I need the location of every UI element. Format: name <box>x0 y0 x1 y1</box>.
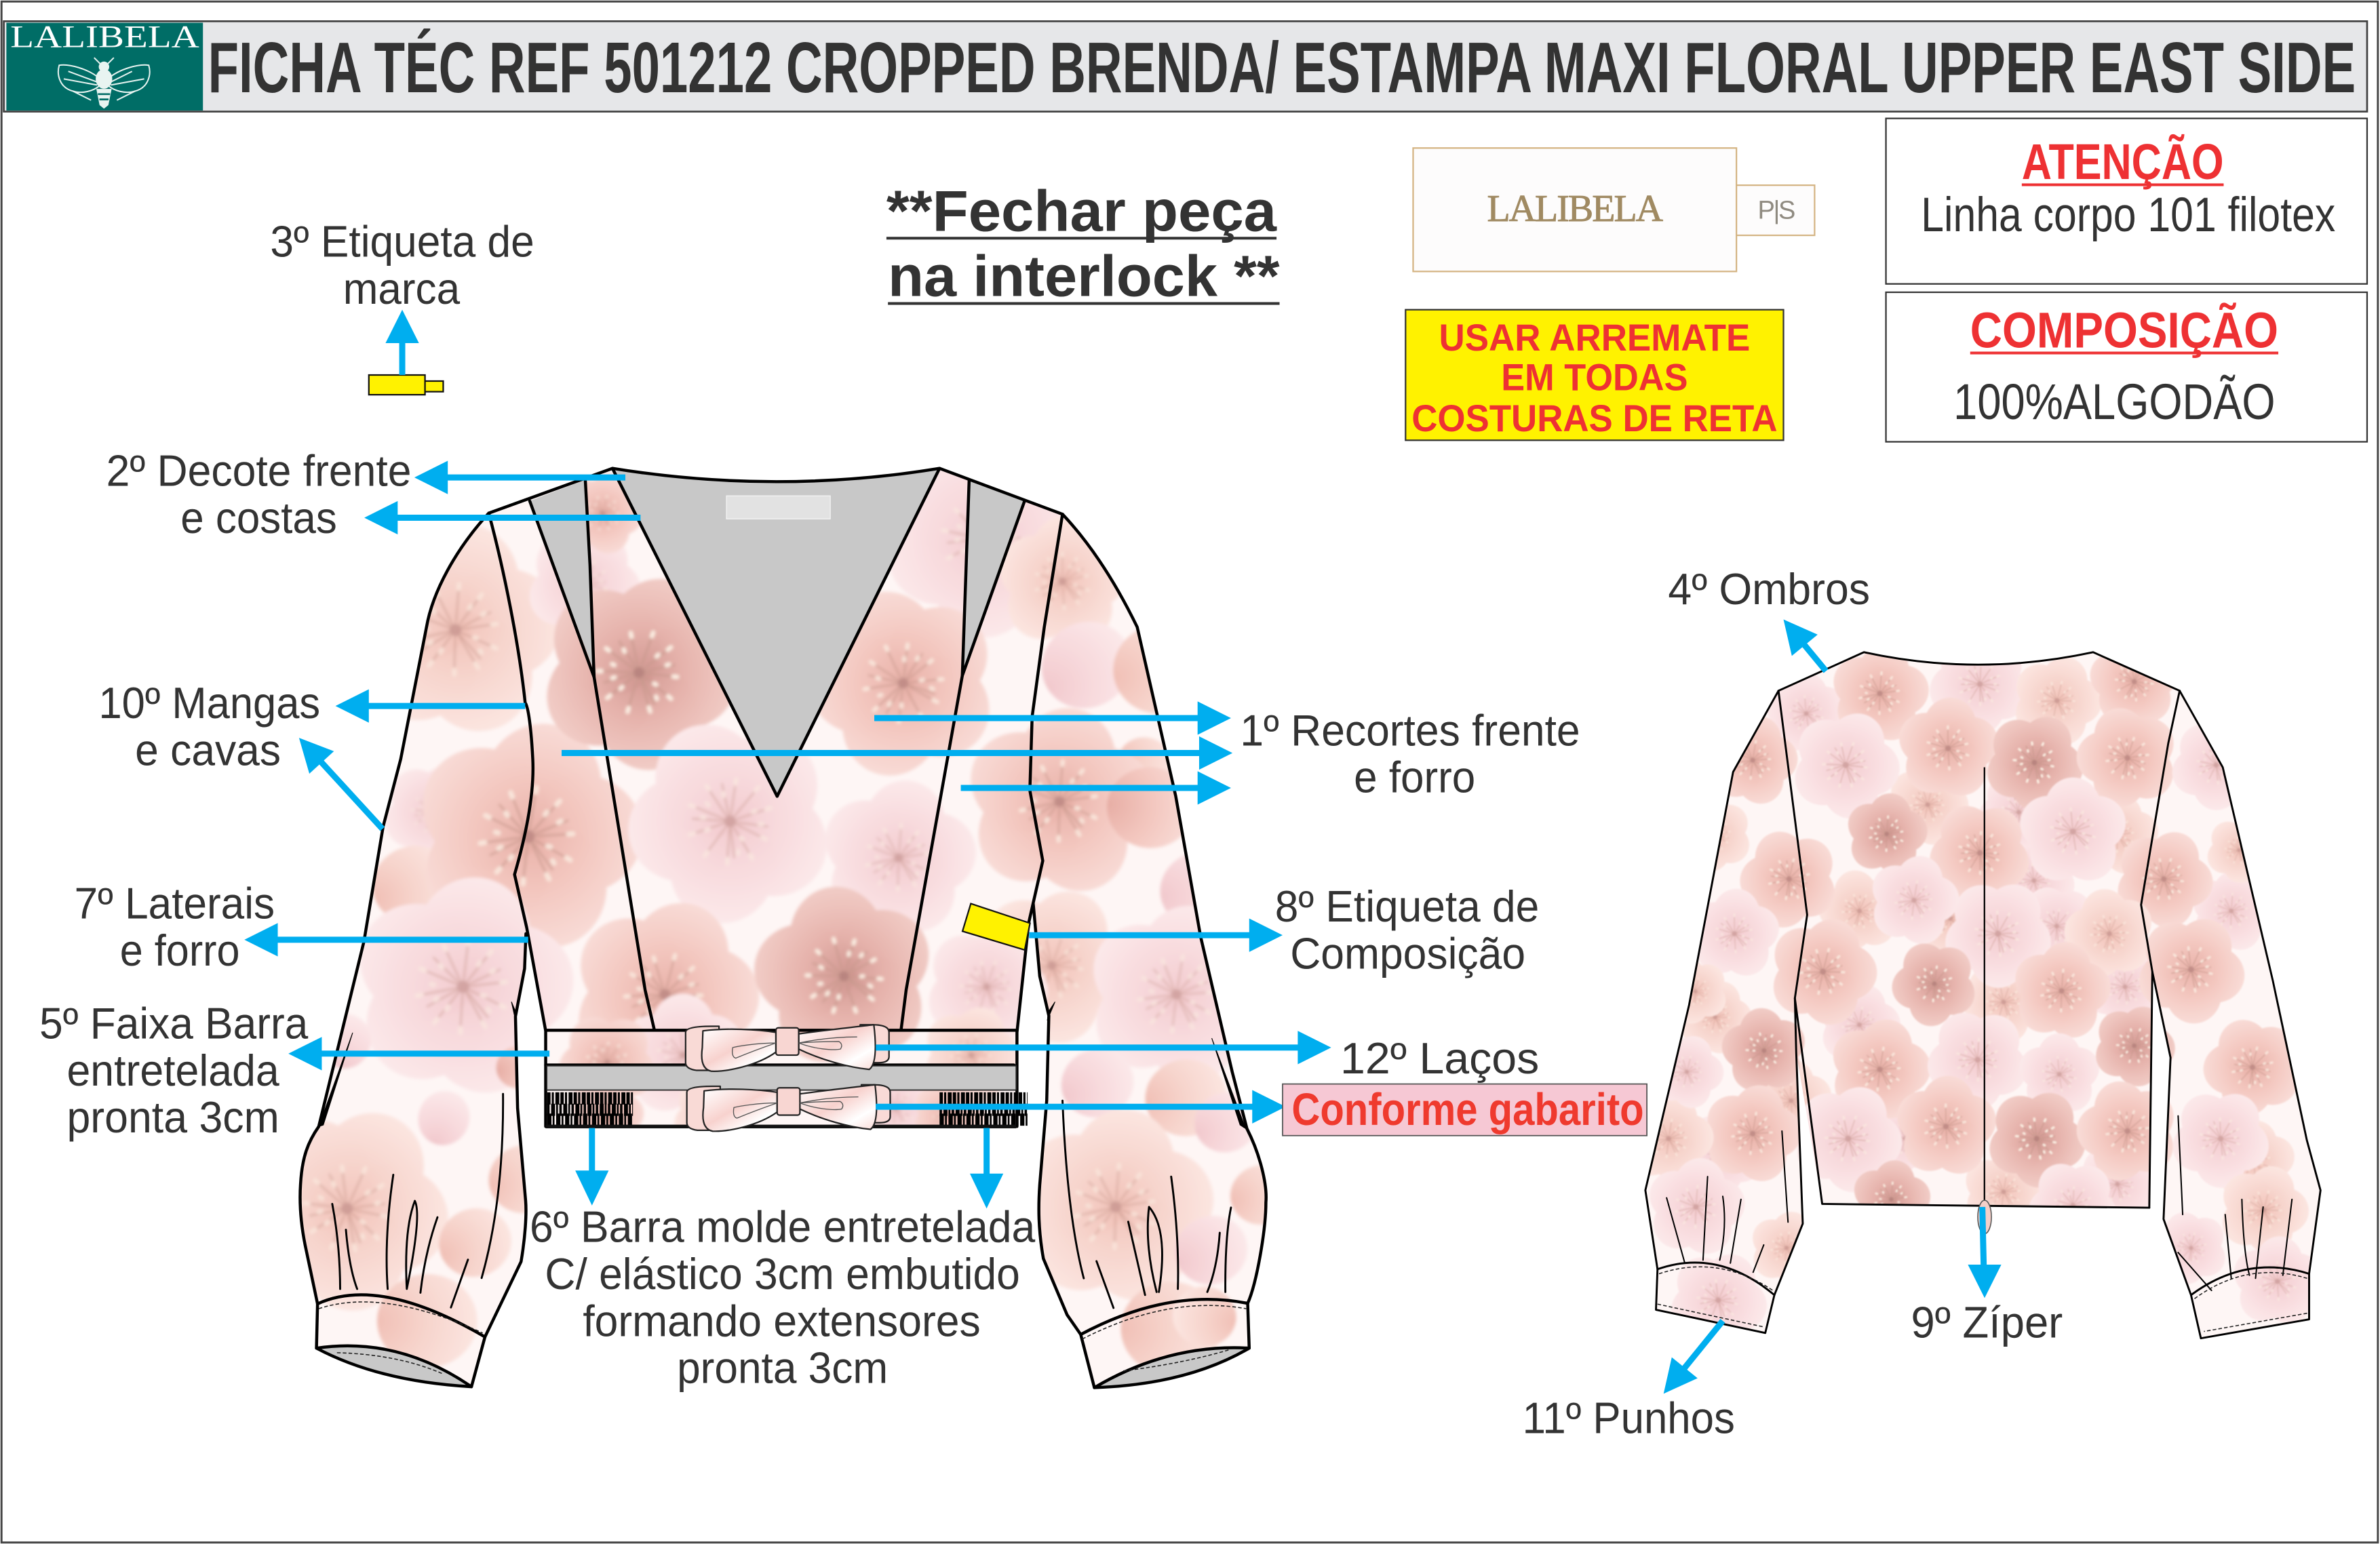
callout: usar arremate: USAR ARREMATE <box>1439 316 1750 359</box>
arrow: 12º laços <box>876 1031 1331 1064</box>
back neck label <box>726 496 830 519</box>
back right cuff <box>2191 1267 2309 1339</box>
note: fechar peça na interlock <box>886 179 1280 309</box>
label: 7º laterais: 7º Laterais <box>75 879 275 928</box>
arrow: 1º recortes bottom <box>961 771 1231 805</box>
garment: front view <box>298 467 1268 1389</box>
arrow: 10º cavas <box>299 738 383 829</box>
arrow: conforme gabarito <box>876 1090 1285 1124</box>
label: 6º barra molde: pronta 3cm <box>677 1343 888 1393</box>
label: 2º decote: 2º Decote frente <box>106 446 411 495</box>
label: 5º faixa barra <box>39 998 309 1142</box>
logo: Lalibela: LALIBELA <box>10 19 199 54</box>
panel: composição: COMPOSIÇÃO <box>1970 302 2278 359</box>
bow top <box>686 1025 889 1071</box>
label: 5º faixa barra: entretelada <box>66 1046 280 1095</box>
label: 3º etiqueta de marca: marca <box>343 264 461 313</box>
arrow: 10º mangas <box>336 689 525 723</box>
composition label on garment <box>962 904 1030 950</box>
grey lining band <box>547 1066 1016 1090</box>
panel: composição: 100%ALGODÃO <box>1953 374 2276 430</box>
callout: usar arremate: EM TODAS <box>1501 355 1688 398</box>
label: 1º recortes: e forro <box>1354 753 1475 802</box>
back seams <box>1645 652 2320 1339</box>
back left cuff <box>1656 1263 1774 1333</box>
icon: bee <box>58 58 150 108</box>
label: 10º mangas: e cavas <box>135 725 281 774</box>
arrow: 1º recortes middle <box>562 736 1232 770</box>
label: 5º faixa barra: 5º Faixa Barra <box>39 998 309 1048</box>
label: 3º etiqueta de marca: 3º Etiqueta de <box>270 216 534 266</box>
label: 12º laços: 12º Laços <box>1340 1033 1539 1083</box>
woven brand label: P|S <box>1757 196 1795 224</box>
arrow: 6º right <box>970 1128 1003 1208</box>
label: 11º punhos: 11º Punhos <box>1523 1393 1735 1443</box>
arrow: 4º ombros <box>1784 619 1826 671</box>
icon: brand label diagram <box>369 375 443 395</box>
arrow: 5º faixa barra <box>288 1037 549 1070</box>
upper waist band <box>546 1030 1017 1065</box>
zipper <box>1978 768 1991 1233</box>
callout: usar arremate <box>1405 310 1784 440</box>
woven brand label: LALIBELA <box>1487 188 1663 230</box>
callout: conforme gabarito: Conforme gabarito <box>1291 1084 1644 1135</box>
callout: usar arremate: COSTURAS DE RETA <box>1411 397 1778 439</box>
arrow: 2º decote costas <box>364 501 640 534</box>
panel: composição <box>1886 292 2367 442</box>
label: 8º etiqueta de composição: Composição <box>1290 928 1525 978</box>
woven brand label <box>1413 148 1814 271</box>
label: 7º laterais: e forro <box>120 926 240 975</box>
label: 6º barra molde: 6º Barra molde entretelada <box>530 1202 1036 1251</box>
waist bands <box>546 1030 1028 1128</box>
label: 10º mangas <box>98 678 320 774</box>
sleeve pleats <box>319 1002 1246 1308</box>
neck lining grey panels <box>530 469 1025 796</box>
label: 10º mangas: 10º Mangas <box>98 678 320 728</box>
left cuff <box>317 1294 485 1387</box>
label: 6º barra molde: C/ elástico 3cm embutido <box>545 1249 1020 1299</box>
arrow: 1º recortes top <box>874 701 1231 735</box>
logo: Lalibela <box>6 19 203 111</box>
bow bottom <box>687 1085 891 1131</box>
garment: back view <box>1644 651 2322 1340</box>
right cuff <box>1080 1299 1249 1387</box>
label: 4º ombros: 4º Ombros <box>1668 564 1870 614</box>
label: 9º zíper: 9º Zíper <box>1911 1297 2063 1347</box>
label: 2º decote: e costas <box>180 493 337 542</box>
note: fechar peça na interlock: **Fechar peça <box>886 179 1277 243</box>
arrow: 8º etiqueta <box>1029 919 1283 952</box>
label: 6º barra molde: formando extensores <box>583 1296 981 1345</box>
panel: atenção: ATENÇÃO <box>2022 134 2223 190</box>
header bar <box>4 19 2367 112</box>
label: 6º barra molde <box>530 1202 1036 1393</box>
arrow: 6º left <box>575 1128 608 1206</box>
label: 1º recortes: 1º Recortes frente <box>1240 705 1580 755</box>
arrow: 3º <box>385 310 419 375</box>
floral print back <box>1647 654 2320 1337</box>
arrow: 2º decote frente <box>414 461 625 494</box>
note: fechar peça na interlock: na interlock ** <box>888 245 1280 309</box>
label: 8º etiqueta de composição <box>1275 882 1539 978</box>
panel: atenção <box>1886 119 2367 284</box>
front seams <box>300 469 1266 1337</box>
arrow: 9º zíper <box>1968 1207 2002 1298</box>
floral print front <box>301 471 1264 1385</box>
label: 8º etiqueta de composição: 8º Etiqueta de <box>1275 882 1539 931</box>
label: 7º laterais <box>75 879 275 975</box>
elastic shirring band <box>546 1098 1028 1128</box>
label: 3º etiqueta de marca <box>270 216 534 313</box>
arrow: 7º laterais <box>244 923 528 957</box>
arrow: 11º punhos <box>1664 1321 1723 1393</box>
label: 5º faixa barra: pronta 3cm <box>66 1092 279 1142</box>
label: 1º recortes <box>1240 705 1580 802</box>
label: 2º decote <box>106 446 411 542</box>
